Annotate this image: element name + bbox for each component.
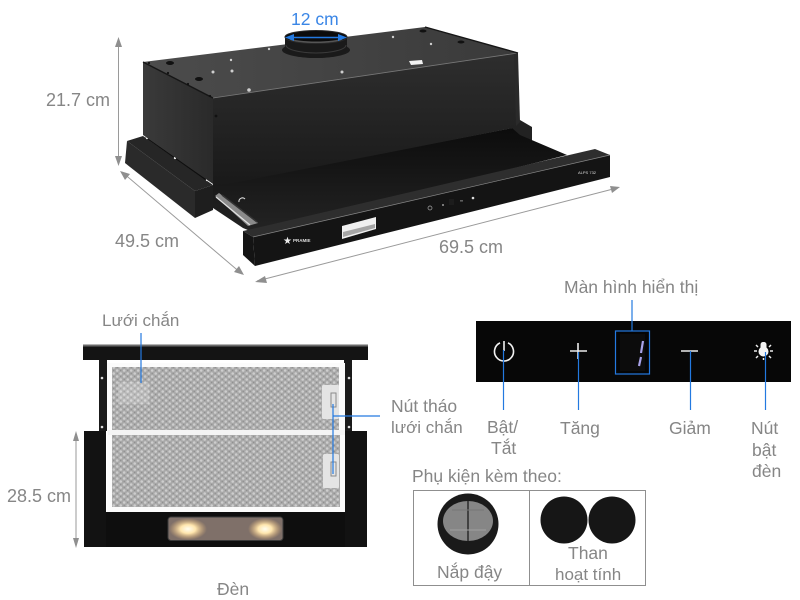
white frame [107, 363, 345, 512]
label: Màn hình hiển thị: Màn hình hiển thị [564, 277, 698, 297]
label: Giảm [669, 351, 711, 438]
icon: power [495, 341, 514, 361]
dimension: 12 cm: 12 cm [291, 9, 339, 29]
rear right block [512, 118, 532, 141]
label: Màn hình hiển thị [564, 277, 698, 331]
label: Nút tháo lưới chắn [333, 396, 463, 474]
display [616, 331, 650, 374]
icon: charcoal filters [540, 496, 636, 544]
icon: cover cap [438, 494, 498, 554]
lower grease filter [112, 435, 340, 507]
label: Lưới chắn [102, 311, 179, 383]
accessory caption: Nắp đậy [437, 561, 502, 582]
hood body [143, 27, 520, 187]
side panels [84, 431, 106, 547]
dimension: 21.7 cm [46, 37, 122, 166]
uprights [99, 360, 107, 431]
dimension: 28.5 cm: 28.5 cm [7, 486, 71, 506]
heading: accessories: Phụ kiện kèm theo: [412, 466, 562, 486]
dimension: 49.5 cm: 49.5 cm [115, 231, 179, 251]
dimension: 69.5 cm: 69.5 cm [439, 237, 503, 257]
label: Bật/Tắt [487, 350, 518, 458]
icon: light bulb [754, 342, 773, 360]
hood product photo: front view [83, 344, 368, 547]
label: Nút tháo lưới chắn: Nút tháo [391, 396, 457, 416]
accessories table [414, 490, 646, 586]
label: Tăng [560, 352, 600, 438]
dimension: 69.5 cm [255, 186, 620, 283]
label: Bật/Tắt: Bật/ [487, 417, 518, 437]
filter latch lower [323, 454, 339, 488]
label: Bật/Tắt: Tắt [491, 437, 516, 458]
brand star logo: PRAMIE [293, 238, 311, 243]
icon: plus [570, 343, 587, 359]
label: Đèn: Đèn [217, 579, 249, 599]
model label: ALPS 732 [578, 170, 597, 175]
label: Tăng: Tăng [560, 418, 600, 438]
top bar [83, 345, 368, 360]
lamp [168, 517, 283, 540]
accessory caption: Than [568, 543, 608, 563]
label: Nút bật đèn: bật [752, 440, 776, 460]
brand star logo [283, 236, 311, 247]
hood product photo: perspective view [125, 27, 610, 266]
control panel [476, 321, 791, 382]
drawer tray top [213, 128, 567, 233]
dimension: 49.5 cm [115, 171, 244, 275]
dimension: 28.5 cm [7, 431, 79, 548]
duct collar [282, 30, 350, 58]
label: Nút tháo lưới chắn: lưới chắn [391, 418, 463, 437]
label: Lưới chắn: Lưới chắn [102, 311, 179, 330]
label: Nút bật đèn: Nút [751, 418, 778, 438]
drawer front panel [243, 149, 610, 266]
label: Nút bật đèn [751, 352, 781, 481]
left base flange [125, 136, 213, 218]
upper grease filter [112, 367, 339, 430]
lower panel [106, 512, 345, 547]
dimension: 12 cm [285, 9, 347, 41]
sliding rail [215, 193, 258, 226]
panel buttons [428, 197, 474, 210]
icon: minus [681, 350, 698, 352]
label: Giảm: Giảm [669, 418, 711, 438]
spec label [342, 217, 376, 239]
brand star logo: ★ [283, 236, 292, 247]
filter latch upper [322, 385, 339, 419]
accessory caption [555, 543, 621, 584]
label: Nút bật đèn: đèn [752, 461, 781, 481]
dimension: 21.7 cm: 21.7 cm [46, 90, 110, 110]
accessory caption: hoạt tính [555, 565, 621, 584]
